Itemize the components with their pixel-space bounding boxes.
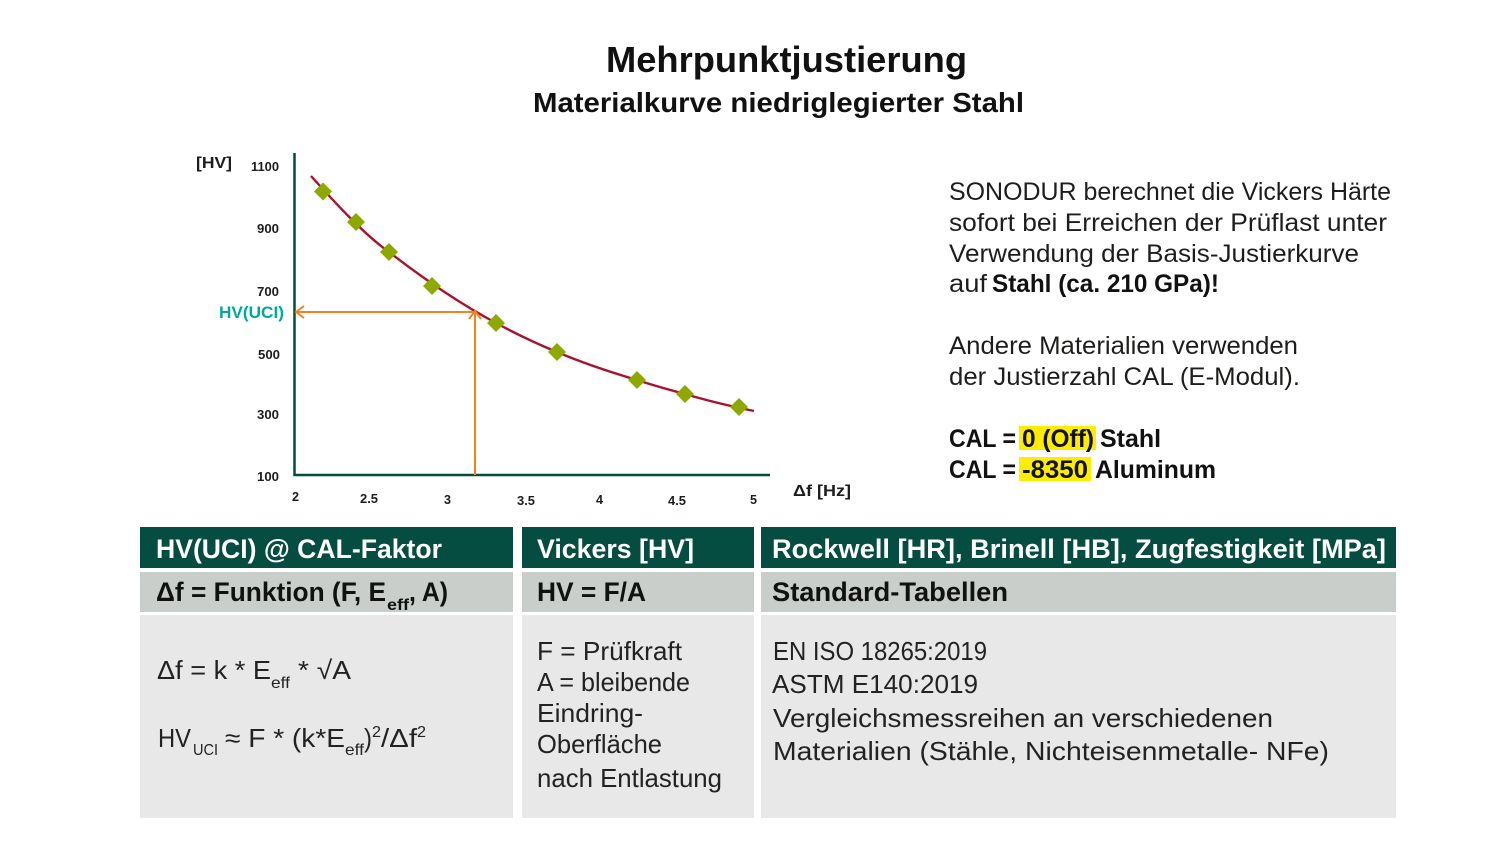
column header [522, 527, 754, 568]
standards list [761, 615, 1396, 818]
x axis labels: 5 [750, 493, 757, 507]
CAL values: CAL = [949, 456, 1016, 484]
formulas: Δf = k * E [157, 655, 271, 685]
explanation text [949, 178, 1391, 391]
explanation text: Verwendung der Basis-Justierkurve [949, 240, 1359, 268]
axes [294, 153, 770, 475]
x axis labels: 3.5 [517, 494, 535, 508]
x axis labels: 2 [292, 490, 299, 504]
orange reading arrows [296, 306, 481, 475]
formulas: UCI [193, 742, 218, 759]
column header [140, 527, 513, 568]
y axis labels: 700 [257, 285, 279, 299]
formulas: * √A [298, 655, 352, 685]
formulas: eff [345, 742, 365, 759]
CAL values: 0 (Off) [1022, 425, 1094, 453]
y axis labels: 100 [257, 470, 279, 484]
formulas: ≈ F * (k*E [225, 723, 345, 753]
x axis labels: 2.5 [360, 492, 378, 506]
panel: Vickers column [522, 527, 754, 818]
standards list: EN ISO 18265:2019 [773, 636, 987, 666]
x axis labels: 3 [444, 493, 451, 507]
x axis labels: Δf [Hz] [793, 483, 851, 500]
definitions: A = bleibende [537, 667, 690, 697]
subheader [761, 572, 1396, 612]
formulas: /Δf [381, 723, 418, 753]
y axis labels: [HV] [196, 155, 232, 172]
CAL values: -8350 [1022, 456, 1088, 484]
definitions: Oberfläche [537, 729, 662, 759]
y axis labels: 1100 [251, 160, 279, 174]
y axis labels: 500 [258, 348, 280, 362]
CAL values: Aluminum [1095, 456, 1216, 484]
definitions: Eindring- [537, 698, 643, 728]
panel: HV(UCI) column [140, 527, 513, 818]
explanation text: auf [949, 270, 987, 298]
subheader [522, 572, 754, 612]
formulas: HV [158, 723, 192, 753]
explanation text: SONODUR berechnet die Vickers Härte [949, 178, 1391, 206]
column header: Vickers [HV] [537, 534, 694, 564]
CAL values: Stahl [1100, 425, 1161, 453]
definitions [522, 615, 754, 818]
explanation text: sofort bei Erreichen der Prüflast unter [949, 209, 1387, 237]
subheader: Δf = Funktion (F, E [156, 577, 386, 607]
definitions: nach Entlastung [537, 763, 722, 793]
CAL values: CAL = [949, 425, 1016, 453]
column header: Rockwell [HR], Brinell [HB], Zugfestigkeit [MPa] [772, 534, 1386, 564]
subheader: Standard-Tabellen [772, 577, 1008, 607]
formulas: 2 [417, 724, 426, 741]
explanation text: Stahl (ca. 210 GPa)! [992, 270, 1219, 298]
standards list: ASTM E140:2019 [772, 669, 978, 699]
y axis labels: 900 [257, 222, 279, 236]
subheader: HV = F/A [537, 577, 646, 607]
standards list: Vergleichsmessreihen an verschiedenen [773, 703, 1273, 733]
subheader [140, 572, 513, 614]
HV(UCI) label: HV(UCI) [219, 303, 284, 322]
line chart: material curve [196, 153, 851, 508]
y axis labels [196, 155, 280, 484]
x axis labels: 4.5 [668, 494, 686, 508]
formulas: ) [364, 723, 372, 753]
x axis labels: 4 [596, 493, 603, 507]
formulas: eff [271, 675, 291, 692]
explanation text: der Justierzahl CAL (E-Modul). [949, 363, 1300, 391]
y axis labels: 300 [257, 408, 279, 422]
panel: conversion column [761, 527, 1396, 818]
title: Mehrpunktjustierung [606, 39, 967, 80]
formulas: 2 [372, 724, 381, 741]
CAL values [949, 425, 1216, 484]
definitions: F = Prüfkraft [537, 636, 683, 666]
formulas [140, 615, 513, 818]
x axis labels [292, 483, 851, 508]
subheader: eff [387, 597, 410, 614]
data points [314, 182, 748, 416]
column header: HV(UCI) @ CAL-Faktor [156, 534, 442, 564]
standards list: Materialien (Stähle, Nichteisenmetalle- NFe) [773, 736, 1329, 766]
curve [311, 176, 754, 411]
explanation text: Andere Materialien verwenden [949, 332, 1298, 360]
subtitle: Materialkurve niedriglegierter Stahl [533, 87, 1024, 118]
subheader: , A) [409, 577, 448, 607]
